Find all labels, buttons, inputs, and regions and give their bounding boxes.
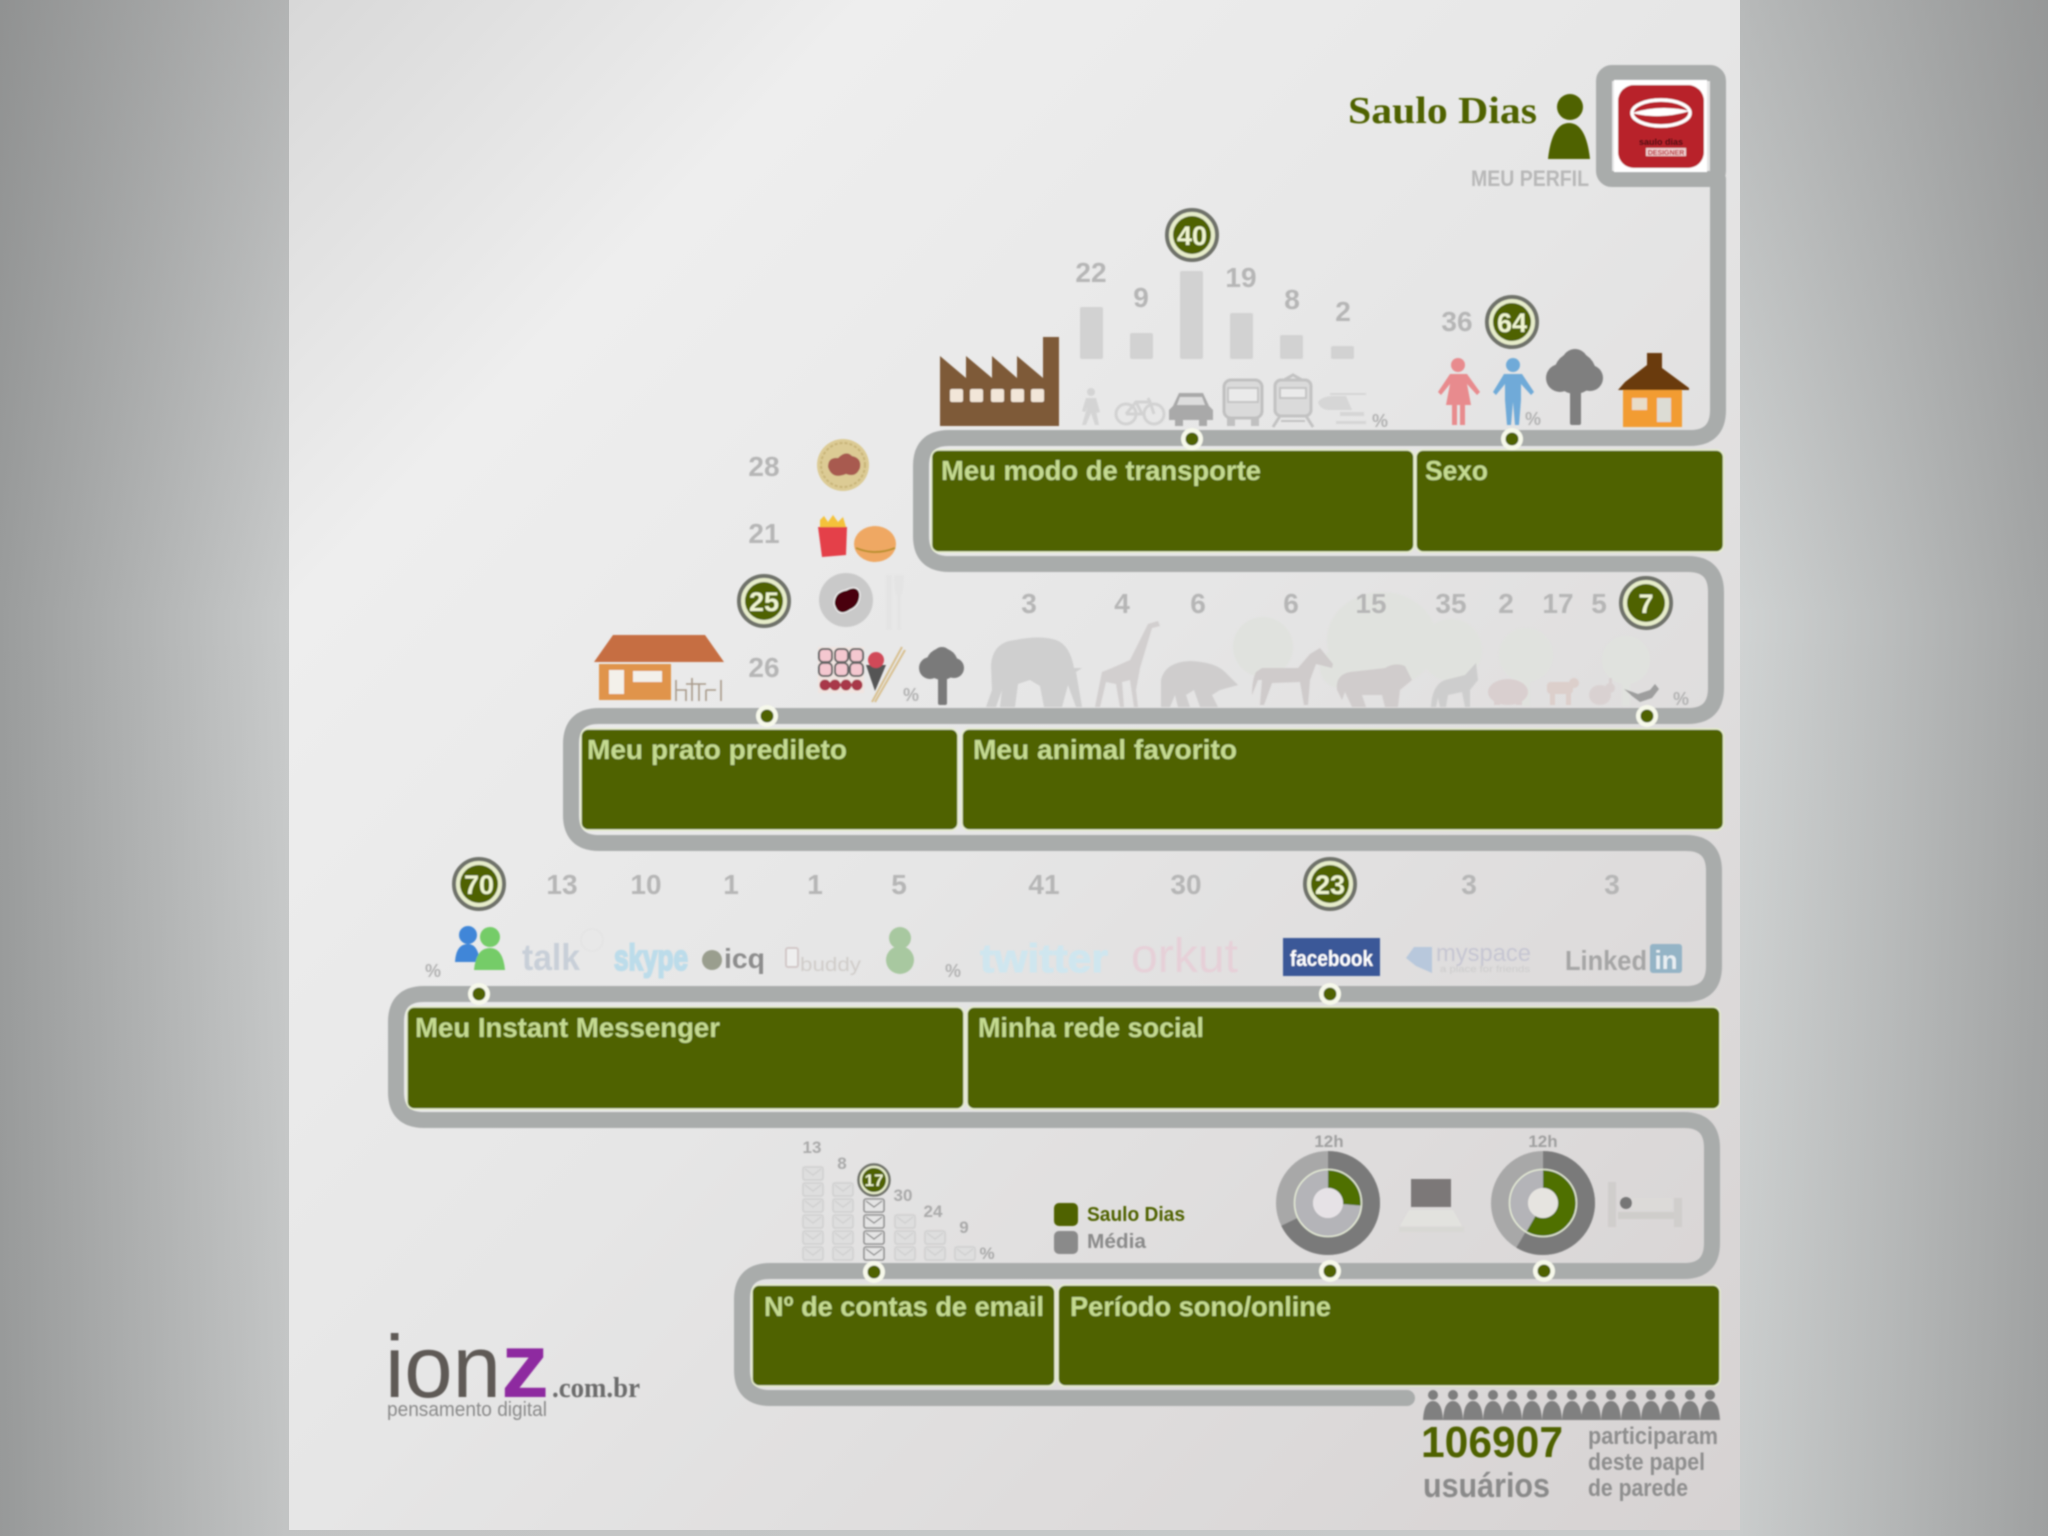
icon: person (1548, 94, 1590, 159)
donut chart: sleep hours (1500, 1132, 1586, 1246)
numbers: messenger values: 13 (546, 869, 578, 900)
logo: ionz: z (501, 1315, 549, 1417)
label box: rede social (967, 1007, 1720, 1109)
numbers: animal values: 6 (1190, 588, 1206, 619)
panel: user count (1421, 1390, 1720, 1505)
panel: Meu Instant Messenger (407, 859, 964, 1109)
bar chart: transport shares (1080, 271, 1354, 359)
panel: Meu animal favorito (962, 578, 1724, 830)
numbers: food values: 28 (748, 451, 780, 482)
panel: Meu prato predileto (581, 439, 964, 830)
icon: factory (940, 337, 1059, 426)
icon: sushi (818, 647, 905, 702)
numbers: messenger values: 10 (630, 869, 662, 900)
label box: sexo (1416, 450, 1724, 552)
badge: 64 (1487, 297, 1537, 347)
panel: Sexo (1416, 297, 1724, 552)
numbers: network values: 30 (1170, 869, 1202, 900)
numbers: email values: 8 (837, 1154, 847, 1173)
logo: facebook: facebook (1290, 946, 1374, 971)
icon: saulo dias logo (1614, 80, 1707, 172)
numbers: animal values (1021, 588, 1607, 619)
connecting track (396, 73, 1718, 1398)
icon: laptop (1399, 1179, 1464, 1232)
percent sign: % (945, 961, 961, 981)
label box: email: Nº de contas de email (764, 1291, 1044, 1322)
panel: Minha rede social (967, 859, 1720, 1109)
icon: msn (455, 926, 505, 970)
numbers: animal values: 17 (1542, 588, 1574, 619)
numbers: animal values: 4 (1114, 588, 1130, 619)
donut chart: sleep hours: 12h (1528, 1132, 1558, 1151)
panel: No de contas de email (752, 1138, 1185, 1386)
logo: myspace (1406, 940, 1531, 974)
logo: icq (702, 943, 765, 974)
legend: Saulo Dias (1087, 1204, 1185, 1226)
panel: Saulo Dias profile header (1348, 80, 1707, 191)
icon: man (1493, 358, 1534, 425)
icon: pasta plate (817, 439, 869, 491)
badge: 25: 25 (749, 587, 779, 617)
label box: sono online: Período sono/online (1070, 1291, 1331, 1322)
badge: 64: 64 (1497, 308, 1527, 338)
numbers: messenger values: 1 (723, 869, 739, 900)
numbers: food values (748, 451, 780, 683)
logo: linkedin: Linked (1565, 945, 1647, 976)
numbers: animal values: 3 (1021, 588, 1037, 619)
numbers: transport values: 22 (1075, 257, 1107, 288)
label box: prato: Meu prato predileto (587, 734, 847, 765)
icon: steak plate (819, 573, 873, 627)
numbers: network values: 3 (1604, 869, 1620, 900)
icon: restaurant (594, 635, 724, 701)
badge: 7 (1621, 578, 1671, 628)
logo: ionz: .com.br (552, 1373, 640, 1404)
numbers: animal values: 5 (1591, 588, 1607, 619)
chart: envelope columns (803, 1167, 975, 1260)
icon: cutlery (886, 575, 904, 630)
text: participaram deste papel de parede: deste papel (1588, 1449, 1705, 1476)
label box: transporte (932, 450, 1414, 552)
numbers: email values: 9 (959, 1218, 969, 1237)
label box: sono online (1058, 1285, 1720, 1386)
numbers: animal values: 6 (1283, 588, 1299, 619)
logo: linkedin: in (1654, 945, 1678, 975)
icons: animal silhouettes (986, 621, 1689, 709)
number: 36: 36 (1441, 306, 1473, 337)
numbers: transport values: 19 (1225, 262, 1257, 293)
legend (1054, 1203, 1185, 1254)
panel: Periodo sono/online (1058, 1132, 1720, 1386)
text: participaram deste papel de parede: participaram (1588, 1423, 1718, 1450)
icon: saulo dias logo: saulo dias (1639, 137, 1683, 147)
logo: ionz: pensamento digital (387, 1399, 547, 1421)
label box: animal (962, 729, 1724, 830)
badge: 23 (1305, 859, 1355, 909)
logo: buddy: buddy (800, 955, 862, 976)
logo: ionz: ion (385, 1317, 501, 1416)
panel: Meu modo de transporte (932, 210, 1414, 552)
badge: 70 (454, 859, 504, 909)
percent sign: % (425, 961, 441, 981)
badge: 40 (1167, 210, 1217, 260)
numbers: email values: 24 (924, 1202, 943, 1221)
subheading: meu perfil: MEU PERFIL (1471, 166, 1589, 191)
logo: orkut: orkut (1131, 930, 1238, 983)
numbers: messenger values: 5 (891, 869, 907, 900)
logo: twitter: twitter (980, 937, 1108, 981)
badge: 25 (739, 576, 789, 626)
icons: transport modes: % (1372, 411, 1388, 431)
icons: transport modes (1082, 375, 1388, 431)
icon: saulo dias logo: DESIGNER (1648, 150, 1684, 157)
label box: transporte: Meu modo de transporte (941, 455, 1261, 486)
label box: sexo: Sexo (1425, 455, 1488, 486)
logo: icq: icq (724, 943, 765, 974)
numbers: email values: % (979, 1244, 995, 1263)
text: participaram deste papel de parede (1588, 1423, 1718, 1502)
badge: 23: 23 (1315, 870, 1345, 900)
numbers: animal values: 2 (1498, 588, 1514, 619)
numbers: network values (1028, 869, 1620, 900)
numbers: email values: 30 (894, 1186, 912, 1205)
heading: name: Saulo Dias (1348, 90, 1537, 132)
logo: google talk (522, 929, 603, 978)
numbers: food values: 21 (748, 518, 780, 549)
badge: 7: 7 (1638, 589, 1654, 619)
numbers: transport values: 8 (1284, 284, 1300, 315)
label box: rede social: Minha rede social (978, 1012, 1204, 1043)
label box: messenger: Meu Instant Messenger (415, 1012, 720, 1043)
text: participaram deste papel de parede: de parede (1588, 1475, 1688, 1502)
badge: 17: 17 (865, 1171, 883, 1190)
icon: house (1618, 353, 1689, 427)
icons: people row (1423, 1390, 1720, 1420)
donut chart: online hours: 12h (1314, 1132, 1344, 1151)
legend: Média (1087, 1231, 1147, 1253)
numbers: messenger values (546, 869, 907, 900)
label box: prato (581, 729, 958, 830)
badge: 17 (858, 1164, 890, 1196)
donut chart: online hours (1286, 1132, 1370, 1246)
logo: buddy (786, 948, 862, 976)
badge: 70: 70 (464, 870, 494, 900)
logo: myspace: myspace (1436, 940, 1531, 967)
numbers: animal values: 35 (1435, 588, 1467, 619)
background trees (1233, 592, 1650, 706)
icon: fries and burger (818, 515, 896, 562)
percent sign: % (903, 685, 919, 705)
logo: skype: skype (614, 937, 688, 978)
icon: tree (1546, 349, 1603, 425)
icon: yahoo messenger figure (886, 927, 914, 974)
numbers: animal values: 15 (1355, 588, 1387, 619)
numbers: transport values: 2 (1335, 296, 1351, 327)
numbers: email values (803, 1138, 995, 1263)
logo: google talk: talk (522, 937, 580, 978)
logo: facebook (1283, 938, 1380, 976)
logo: myspace: a place for friends (1440, 964, 1531, 974)
numbers: food values: 26 (748, 652, 780, 683)
percent sign: % (1525, 409, 1541, 429)
icon: woman (1438, 358, 1480, 425)
icon: bed (1608, 1182, 1682, 1227)
track markers (468, 428, 1658, 1283)
icons: animal silhouettes: % (1673, 689, 1689, 709)
label box: animal: Meu animal favorito (973, 734, 1237, 765)
badge: 40: 40 (1177, 221, 1207, 251)
text: usuarios: usuários (1423, 1467, 1550, 1505)
number: 106907: 106907 (1421, 1418, 1563, 1467)
numbers: email values: 13 (803, 1138, 821, 1157)
numbers: messenger values: 1 (807, 869, 823, 900)
numbers: transport values (1075, 257, 1351, 327)
numbers: network values: 3 (1461, 869, 1477, 900)
logo: ionz (385, 1315, 640, 1421)
label box: messenger (407, 1007, 964, 1109)
numbers: transport values: 9 (1133, 282, 1149, 313)
numbers: network values: 41 (1028, 869, 1060, 900)
label box: email (752, 1285, 1055, 1386)
icon: tree (919, 647, 964, 705)
